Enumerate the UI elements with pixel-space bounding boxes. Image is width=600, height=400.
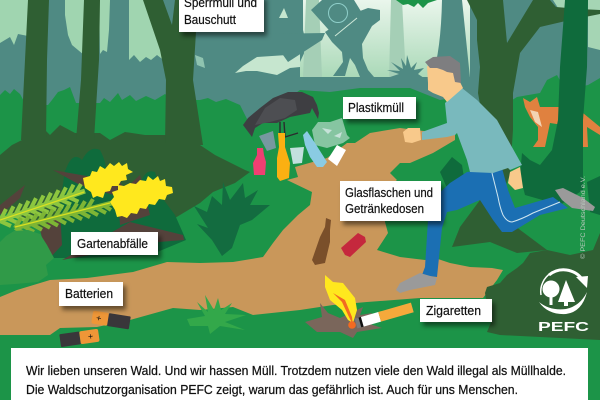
label: Gartenabfälle: Gartenabfälle [77, 237, 148, 251]
white cup [328, 145, 346, 166]
garden waste [0, 149, 186, 260]
teal background forest [0, 0, 600, 130]
crow [243, 92, 319, 137]
text panel: Die Waldschutzorganisation PEFC zeigt, warum das gefährlich ist. Auch für uns Menschen. [26, 382, 518, 397]
garden bush [45, 170, 186, 258]
blue bottle [303, 131, 327, 167]
mint background patches [0, 0, 166, 62]
washing machine [311, 0, 362, 38]
label: Plastikmüll: Plastikmüll [348, 101, 404, 115]
orange bottle [277, 133, 290, 181]
label: Sperrmüll und Bauschutt: Bauschutt [184, 13, 236, 27]
fern right [15, 199, 112, 234]
dark tree mass left [0, 125, 250, 240]
mint right of big tree [588, 0, 600, 50]
fern stems [0, 192, 110, 227]
teal tree right [432, 0, 470, 78]
pale cup [290, 147, 304, 164]
can on path [341, 233, 366, 257]
green bush right edge [587, 176, 600, 215]
yellow flowers [83, 162, 133, 198]
flame [325, 275, 357, 329]
cigarette [355, 303, 414, 328]
plastic bag [312, 118, 350, 148]
washing machine drum [328, 4, 348, 22]
label: Glasflaschen und Getränkedosen: Glasflaschen und [345, 186, 433, 200]
light forest clearing [300, 0, 470, 78]
fire scorch [305, 303, 382, 338]
runner [396, 56, 595, 293]
label: Sperrmüll und Bauschutt [179, 0, 264, 32]
bush bottom left [0, 230, 54, 285]
swoosh top [549, 270, 582, 279]
fox [523, 97, 600, 147]
fern middle [194, 182, 270, 256]
sofa handles [262, 33, 325, 62]
small triangle opening [279, 8, 288, 18]
figure [325, 8, 380, 77]
grey cup [259, 131, 276, 151]
foliage top [396, 0, 437, 8]
fern left [0, 184, 85, 226]
trouser stripe [492, 173, 560, 222]
hand right [508, 167, 523, 190]
label: Zigaretten [420, 299, 492, 322]
text panel [11, 348, 588, 400]
label: Batterien [59, 282, 123, 306]
forest path [0, 128, 503, 335]
face [427, 66, 463, 102]
swoosh left thin [541, 273, 551, 295]
battery two: + [87, 331, 94, 342]
tree foot triangle [452, 200, 547, 253]
small grass [187, 295, 246, 334]
brown branches [0, 170, 184, 260]
plant silhouette [387, 55, 424, 78]
torso [422, 88, 522, 173]
bottles and plastic waste [253, 118, 350, 181]
text panel: Wir lieben unseren Wald. Und wir hassen Müll. Trotzdem nutzen viele den Wald illegal als Müllhalde. [26, 363, 566, 378]
tree trunks left [21, 0, 203, 145]
copyright: © PEFC Deutschland e.V. [579, 176, 587, 259]
bottle on path [312, 218, 331, 265]
hair [425, 56, 461, 83]
silhouette: carrying washing machine [262, 0, 380, 77]
battery one [91, 311, 131, 329]
shoe front [396, 273, 437, 293]
ground teal band [0, 77, 480, 107]
green tree trunk right [520, 0, 588, 205]
PEFC wordmark: PEFC [538, 320, 589, 334]
hand left [403, 128, 421, 143]
battery one: + [95, 313, 102, 323]
swoosh bottom [539, 292, 587, 314]
strap line [335, 18, 357, 36]
pefc logo [538, 270, 589, 334]
label: Batterien: Batterien [65, 287, 113, 301]
label: Gartenabfälle [71, 232, 158, 255]
pefc bush [485, 233, 600, 340]
trousers [422, 168, 568, 277]
tree round [542, 280, 560, 298]
tree pointed [558, 280, 575, 306]
label: Glasflaschen und Getränkedosen [340, 181, 441, 221]
small leaf lumps [440, 157, 466, 195]
shoe back [555, 188, 595, 211]
label: Zigaretten: Zigaretten [426, 304, 481, 318]
label: Glasflaschen und Getränkedosen: Getränkedosen [345, 202, 424, 216]
label: Plastikmüll [343, 97, 416, 119]
pale jagged patch [235, 47, 300, 75]
large right tree [467, 0, 600, 210]
pale trunks [303, 0, 406, 78]
leaf blobs [65, 149, 106, 175]
pink bottle [253, 148, 266, 175]
battery two [59, 329, 100, 347]
